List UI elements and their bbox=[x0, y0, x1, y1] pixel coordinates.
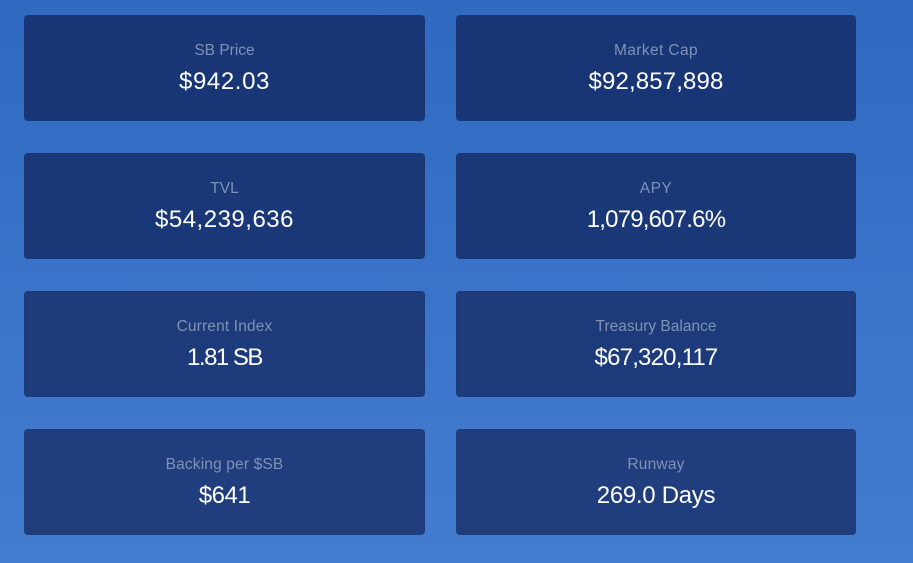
label: Market Cap: Market Cap bbox=[614, 42, 698, 59]
label: APY: APY bbox=[640, 180, 672, 197]
label: TVL: TVL bbox=[210, 180, 239, 197]
value: Backing per $SB: $641 bbox=[199, 482, 250, 509]
panel: Current Index bbox=[24, 291, 425, 397]
value: SB Price: $942.03 bbox=[179, 68, 270, 95]
value: Market Cap: $92,857,898 bbox=[588, 68, 724, 95]
panel: Market Cap bbox=[456, 15, 856, 121]
value: TVL: $54,239,636 bbox=[155, 206, 294, 233]
panel: APY bbox=[456, 153, 856, 259]
label: Backing per $SB: Backing per $SB bbox=[166, 456, 283, 473]
label: Runway: Runway bbox=[627, 456, 685, 473]
panel: Backing per $SB bbox=[24, 429, 425, 535]
value: APY: 1,079,607.6% bbox=[587, 206, 725, 233]
label: Current Index: Current Index bbox=[177, 318, 272, 335]
panel: TVL bbox=[24, 153, 425, 259]
value: Runway: 269.0 Days bbox=[597, 482, 715, 509]
value: Treasury Balance: $67,320,117 bbox=[595, 344, 717, 371]
label: Treasury Balance: Treasury Balance bbox=[596, 318, 716, 335]
panel: Treasury Balance bbox=[456, 291, 856, 397]
value: Current Index: 1.81 SB bbox=[187, 344, 262, 371]
panel: Runway bbox=[456, 429, 856, 535]
label: SB Price: SB Price bbox=[194, 42, 255, 59]
panel: SB Price bbox=[24, 15, 425, 121]
